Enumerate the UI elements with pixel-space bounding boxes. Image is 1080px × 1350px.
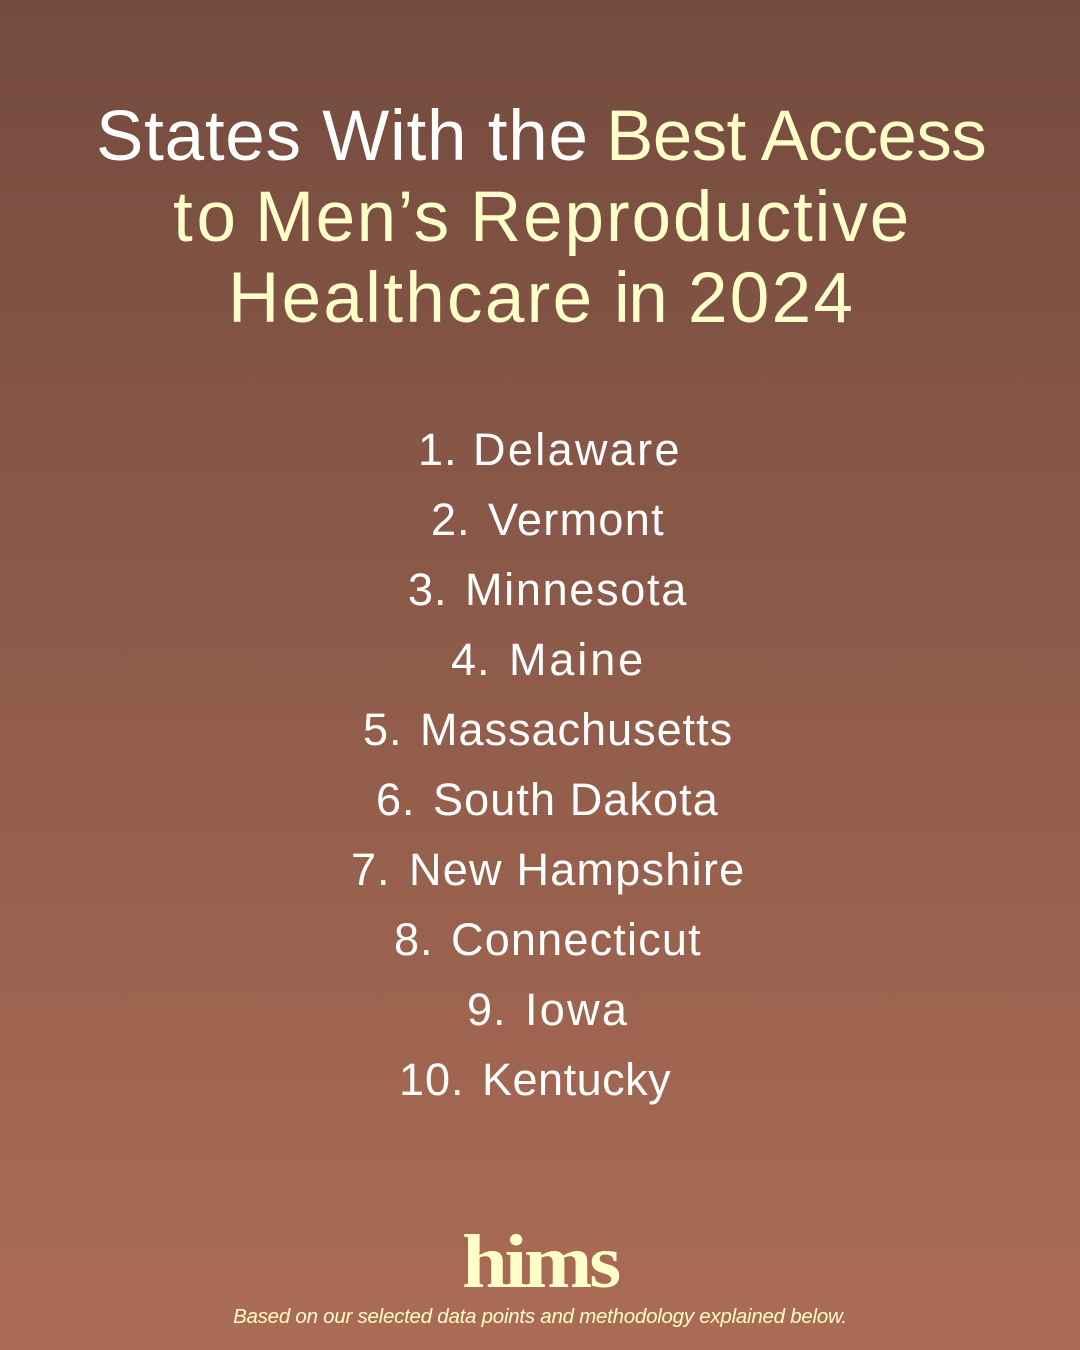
- title: in: [614, 259, 666, 338]
- rank 4: 4.: [451, 634, 491, 685]
- title: [96, 97, 986, 338]
- title: 2024: [688, 259, 855, 338]
- title: Men’s: [255, 178, 451, 257]
- rank 7: New Hampshire: [409, 844, 745, 895]
- rank 5: 5.: [363, 704, 403, 755]
- rank 3: 3.: [408, 564, 448, 615]
- logo: hims: hims: [462, 1220, 618, 1304]
- rank 7: 7.: [351, 844, 391, 895]
- rank 1: 1.: [418, 424, 458, 475]
- title: Best Access: [606, 97, 986, 176]
- title: Reproductive: [470, 178, 911, 257]
- rank 10: [399, 1054, 671, 1105]
- rank 2: 2.: [431, 494, 471, 545]
- rank 9: [467, 984, 629, 1035]
- rank 10: Kentucky: [482, 1054, 671, 1105]
- rank 9: 9.: [467, 984, 507, 1035]
- rank 1: Delaware: [473, 424, 682, 475]
- rank 5: Massachusetts: [420, 704, 733, 755]
- rank 10: 10.: [399, 1054, 465, 1105]
- rank 8: Connecticut: [451, 914, 702, 965]
- rank 9: Iowa: [525, 984, 629, 1035]
- rank 3: Minnesota: [465, 564, 688, 615]
- rank 4: Maine: [509, 634, 646, 685]
- ranked list of states: [351, 424, 745, 1105]
- footnote: Based on our selected data points and methodology explained below.: [233, 1305, 847, 1328]
- title: Healthcare: [228, 259, 594, 338]
- rank 8: 8.: [394, 914, 434, 965]
- rank 6: South Dakota: [433, 774, 719, 825]
- title: to: [173, 178, 240, 257]
- title: States With the: [96, 97, 589, 176]
- rank 6: 6.: [376, 774, 416, 825]
- rank 2: Vermont: [488, 494, 665, 545]
